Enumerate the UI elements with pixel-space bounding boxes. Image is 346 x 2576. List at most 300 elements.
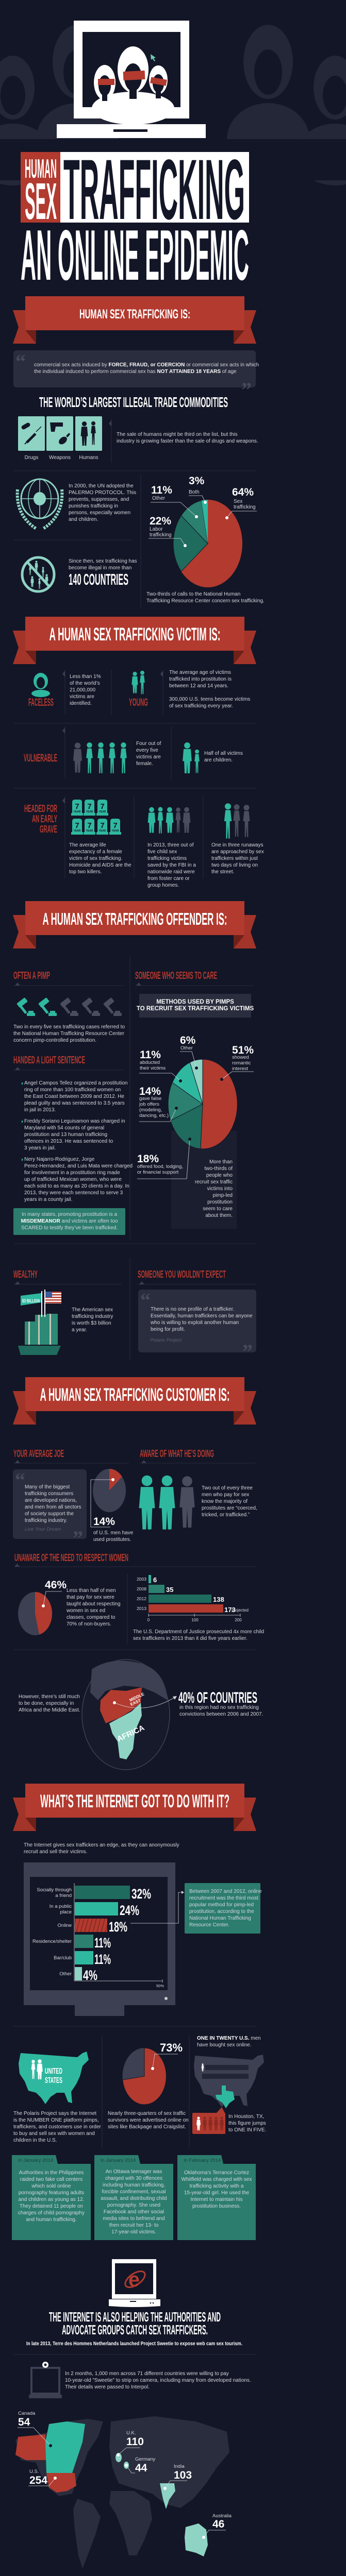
text: card ottawa: 17-year-old victims.: [111, 2229, 156, 2235]
text: two thirds of calls: Two-thirds of calls to the National Human: [146, 591, 240, 597]
text: YOUR AVERAGE JOE: [13, 1448, 64, 1460]
icon: laptop with browser: [109, 2259, 160, 2307]
text: card oklahoma: trafficking activity with a: [190, 2183, 243, 2189]
bar chart: prosecutions: 200: [235, 1618, 242, 1622]
bar chart: prosecutions: 2013: [137, 1606, 146, 1611]
icon: tombstones 7 years: 7: [87, 802, 92, 811]
text: sex ed: 70% of non-buyers.: [67, 1621, 111, 1627]
text: faceless: identified.: [70, 701, 92, 706]
40% of countries: 40% OF COUNTRIES: [178, 1689, 257, 1706]
icon: laptop with browser: e: [128, 2268, 140, 2291]
icon: young children: [131, 671, 145, 694]
header box: methods used by pimps: METHODS USED BY PIMPS: [156, 999, 234, 1005]
pie chart: recruitment methods: 18%: [137, 1153, 159, 1165]
pie chart: 73% advertised online: 73%: [160, 2041, 183, 2054]
bar chart: prosecutions: 173: [224, 1606, 236, 1614]
text: seem to care: pimp-led: [213, 1193, 233, 1198]
text: houston: to ONE IN FIVE.: [228, 2127, 266, 2133]
text: biggest consumers: and men from all sectors: [25, 1504, 81, 1510]
globe: africa and middle east: EAST: [129, 1698, 142, 1707]
world map: sweetie offenders by country: 44: [135, 2462, 147, 2474]
text: foster care: from foster care or: [147, 876, 190, 882]
text: internet edge: recruit and sell their victims.: [24, 1849, 87, 1855]
text: sweetie: In 2 months, 1,000 men across 71 different countries were willing to pay: [65, 2371, 229, 2377]
quote box: live your dream: Live Your Dream: [25, 1527, 61, 1532]
text: half children: Half of all victims: [204, 751, 243, 756]
world map: sweetie offenders by country: Australia: [212, 2513, 232, 2519]
icon: tombstones 7 years: 7: [87, 821, 92, 830]
text: sex ed: women in sex ed: [67, 1608, 105, 1614]
bar chart in monitor: recruitment locations: Online: [58, 1923, 72, 1928]
text: number one platform: to buy and sell sex with women and: [13, 2131, 95, 2137]
pie chart: hotline calls: 11%: [151, 484, 172, 496]
icon: map one in twenty and houston: [192, 2055, 264, 2134]
icon: tombstones 7 years: 7: [113, 821, 118, 830]
quote text: definition: commercial sex acts induced by FORCE, FRAUD, or COERCION or commercial sex acts in which: [34, 362, 259, 368]
text: card oklahoma: [182, 2170, 252, 2209]
icon: money stacks with flags: [18, 1290, 61, 1355]
text: life expectancy: expectancy of a female: [69, 849, 122, 855]
text: sweetie: [65, 2371, 251, 2390]
text: biggest consumers: Many of the biggest: [25, 1484, 70, 1490]
icon: runaways: [224, 803, 250, 839]
ribbon: customer: [13, 1377, 256, 1425]
text: pimp-controlled: [13, 1024, 125, 1043]
bar chart in monitor: recruitment locations: place: [60, 1909, 72, 1915]
world map: sweetie offenders by country: [15, 2411, 232, 2568]
text: department of justice: The U.S. Department of Justice prosecuted 4x more child: [133, 1629, 264, 1635]
pie chart: hotline calls: 22%: [150, 515, 171, 527]
icon: tombstones 7 years: [71, 800, 121, 835]
ribbon: internet: [13, 1784, 256, 1831]
text: palermo protocol: [69, 483, 136, 522]
pie chart: recruitment methods: interest: [232, 1066, 249, 1072]
text: department of justice: sex traffickers in 2013 than it did five years earlier.: [133, 1636, 248, 1641]
text: seem to care: about them.: [205, 1213, 233, 1218]
icon labels: Humans: [79, 455, 98, 461]
text: foster care: [147, 842, 196, 888]
text: sex ed: [67, 1588, 121, 1627]
text: AWARE OF WHAT HE’S DOING: [140, 1448, 214, 1460]
news cards: In February 2014: [184, 2158, 221, 2163]
text: female victims: Four out of: [136, 741, 161, 747]
text: american industry: trafficking industry: [72, 1314, 113, 1319]
text: sex ed: Less than half of men: [67, 1588, 116, 1594]
quote box: live your dream: “: [15, 1468, 25, 1492]
bar chart: prosecutions: 0: [147, 1618, 150, 1622]
text: no one profile: who is willing to exploit another human: [151, 1320, 239, 1326]
text: houston: [228, 2114, 266, 2133]
text: card ottawa: pornography. She used: [107, 2202, 160, 2208]
news cards: In January 2014: [18, 2158, 53, 2163]
text: sweetie: Their details were passed to Interpol.: [65, 2384, 150, 2390]
title: human sex trafficking: SEX: [25, 173, 57, 230]
text: card oklahoma: Internet to maintain his: [190, 2197, 243, 2202]
text: card philippines: Authorities in the Philippines: [19, 2170, 84, 2176]
bar chart in monitor: recruitment locations: 18%: [109, 1919, 127, 1935]
text: card oklahoma: Whitfield was charged with sex: [182, 2177, 252, 2182]
text: SOMEONE YOU WOULDN’T EXPECT: [138, 1269, 226, 1280]
bar chart: prosecutions: 100: [191, 1618, 199, 1622]
text: since then: become illegal in more than: [69, 565, 131, 571]
bar chart in monitor: recruitment locations: a friend: [55, 1893, 72, 1899]
bar chart in monitor: recruitment locations: 50%: [156, 1984, 164, 1988]
text: callout online recruitment: prostitution, according to the: [189, 1909, 254, 1914]
text: foster care: In 2013, three out of: [147, 842, 194, 848]
pie chart: 73% advertised online: [123, 2041, 183, 2105]
text: one in twenty: [197, 2036, 261, 2048]
text: case 3: each sold to as many as 20 clients in a day. In: [24, 1183, 129, 1189]
text: faceless: [70, 674, 101, 706]
quote box: definition: ”: [241, 378, 252, 401]
text: runaways: the street.: [211, 869, 234, 875]
pie chart: hotline calls: Labor: [150, 527, 163, 532]
text: life expectancy: Homicide and AIDS are the: [69, 862, 131, 868]
text: seem to care: victims into: [207, 1186, 233, 1192]
text: card ottawa: An Ottawa teenager was: [106, 2169, 162, 2175]
pie chart: recruitment methods: 14%: [139, 1086, 161, 1097]
pie chart: hotline calls: Sex: [234, 499, 242, 504]
text: callout online recruitment: Between 2007 and 2012, online: [189, 1889, 262, 1894]
text: palermo protocol: prevents, suppresses, and: [69, 497, 129, 502]
text: foster care: nationwide raid were: [147, 869, 195, 875]
text: callout online recruitment: [189, 1889, 262, 1928]
text: young: 300,000 U.S. teens become victims: [169, 697, 250, 702]
text: houston: In Houston, TX,: [228, 2114, 264, 2120]
text: foster care: trafficking victims: [147, 856, 187, 861]
text: runaways: two days of living on: [211, 862, 258, 868]
icon: money stacks with flags: $3 BILLION: [22, 1298, 40, 1303]
text: FACELESS: [28, 697, 54, 708]
text: life expectancy: The average life: [69, 842, 106, 848]
text: used prostitutes: [93, 1530, 133, 1543]
icon: tombstones 7 years: YEAR: [99, 810, 106, 814]
text: case 1: in jail in 2013.: [24, 1107, 56, 1113]
text: card philippines: raided two fake call centers: [20, 2177, 83, 2182]
world map: sweetie offenders by country: 110: [126, 2436, 144, 2448]
bar chart: prosecutions: 2008: [137, 1586, 146, 1591]
text: case 1: ring of more than 100 trafficked women on: [24, 1087, 121, 1093]
text: misdemeanor: SCARED to testify they’ve been trafficked.: [21, 1225, 118, 1231]
text: two out of three men: men who pay for sex: [202, 1492, 249, 1498]
quote box: definition: “: [15, 350, 26, 373]
text: card oklahoma: Oklahoma’s Terrance Cortez: [184, 2170, 249, 2176]
quote box: definition: [13, 350, 256, 401]
pie chart: recruitment methods: 51%: [232, 1044, 254, 1056]
text: faceless: victims are: [70, 694, 94, 700]
pie chart: recruitment methods: 6%: [180, 1035, 196, 1046]
text: palermo protocol: punishes trafficking in: [69, 503, 118, 509]
text: no one profile: [151, 1307, 253, 1332]
text: sale of humans: industry is growing faster than the sale of drugs and weapons.: [117, 438, 258, 444]
icon labels: Weapons: [49, 455, 71, 461]
quote box: polaris project: [138, 1289, 256, 1363]
text: no convictions: convictions between 2006 and 2007.: [179, 1711, 263, 1717]
text: AN EARLY: [32, 814, 57, 825]
text: HANDED A LIGHT SENTENCE: [13, 1055, 85, 1066]
bar chart in monitor: recruitment locations: In a public: [50, 1904, 72, 1909]
text: young: between 12 and 14 years.: [169, 683, 228, 689]
header background faces: [0, 25, 346, 185]
icon: tombstones 7 years: YEAR: [99, 829, 106, 833]
text: case 1: [24, 1080, 128, 1113]
quote box: live your dream: [13, 1468, 87, 1550]
bar chart in monitor: recruitment locations: 11%: [94, 1935, 111, 1951]
text: biggest consumers: trafficking consumers: [25, 1491, 73, 1497]
text: no one profile: There is no one profile of a trafficker.: [151, 1307, 234, 1312]
text: american industry: [72, 1307, 113, 1333]
icon: united states map: [19, 2052, 89, 2104]
heading: often a pimp: OFTEN A PIMP: [13, 970, 50, 981]
text: biggest consumers: of society support the: [25, 1511, 74, 1517]
text: two out of three men: [202, 1485, 257, 1518]
text: card philippines: [18, 2170, 85, 2223]
text: YOUNG: [129, 697, 148, 708]
text: card philippines: and human trafficking.: [26, 2217, 77, 2223]
text: two out of three men: know the majority of: [202, 1499, 248, 1504]
text: backpage craigslist: sites like Backpage and Craigslist.: [108, 2124, 186, 2130]
icon labels: [25, 455, 98, 461]
text: half children: are children.: [204, 757, 233, 763]
bar chart: prosecutions: 2012: [137, 1596, 146, 1601]
ribbon: human sex trafficking is: HUMAN SEX TRAFFICKING IS:: [79, 307, 190, 321]
bar chart in monitor: recruitment locations: [24, 1862, 175, 2016]
text: half children: [204, 751, 243, 763]
text: palermo protocol: persons, especially women: [69, 510, 130, 516]
text: callout online recruitment: recruitment was the third most: [189, 1895, 258, 1901]
callout: misdemeanor: [13, 1208, 125, 1235]
pie chart: recruitment methods: gave false: [139, 1096, 161, 1101]
text: female victims: every five: [136, 748, 158, 753]
text: biggest consumers: trafficking industry.: [25, 1518, 67, 1523]
bar chart: prosecutions: 6: [153, 1576, 157, 1584]
text: runaways: traffickers within just: [211, 856, 258, 861]
pie chart: hotline calls: 3%: [189, 475, 205, 487]
text: life expectancy: [69, 842, 131, 875]
text: two out of three men: tricked, or trafficked.”: [202, 1512, 250, 1518]
pie chart: recruitment methods: showed: [232, 1055, 249, 1060]
text: runaways: are approached by sex: [211, 849, 264, 855]
heading: internet helping authorities: [49, 2309, 221, 2337]
text: foster care: saved by the FBI in a: [147, 862, 196, 868]
bar chart: prosecutions: 2003: [137, 1577, 146, 1582]
globe: africa and middle east: MIDDLE: [128, 1691, 145, 1703]
text: case 2: prostitution and 13 human trafficking: [24, 1132, 107, 1138]
pie chart: 14% of men: [91, 1469, 126, 1528]
quote box: polaris project: “: [140, 1289, 151, 1312]
text: palermo protocol: and children.: [69, 517, 98, 522]
text: life expectancy: victim of sex trafficking.: [69, 856, 122, 861]
text: VULNERABLE: [24, 752, 57, 764]
text: seem to care: recruit sex traffic: [195, 1179, 233, 1185]
icon: tombstones 7 years: YEAR: [86, 829, 93, 833]
text: used prostitutes: used prostitutes.: [93, 1537, 131, 1543]
text: card ottawa: media sites to befriend and: [103, 2216, 165, 2222]
text: UNAWARE OF THE NEED TO RESPECT WOMEN: [14, 1552, 128, 1564]
pie chart: recruitment methods: dancing, etc.): [139, 1113, 169, 1118]
text: runaways: [211, 842, 264, 875]
news cards: In January 2014: [101, 2158, 136, 2163]
world map: sweetie offenders by country: Canada: [18, 2411, 36, 2416]
text: callout online recruitment: Resource Center.: [189, 1922, 229, 1928]
pie chart: hotline calls: 64%: [232, 486, 254, 498]
pie chart: 46%: [18, 1579, 67, 1635]
text: case 2: Maryland with 54 counts of general: [24, 1125, 104, 1131]
bar chart in monitor: recruitment locations: Residence/shelter: [32, 1939, 72, 1944]
text: young: [169, 670, 250, 709]
text: case 3: for involvement in a prostitution ring made: [24, 1170, 120, 1176]
pie chart: recruitment methods: or financial support: [137, 1170, 179, 1175]
text: palermo protocol: PALERMO PROTOCOL. This: [69, 490, 136, 496]
text: case 3: Perez-Hernandez, and Luis Mata were charged: [24, 1163, 133, 1169]
text: card oklahoma: prostitution business.: [192, 2204, 241, 2209]
text: seem to care: [195, 1159, 233, 1218]
text: runaways: One in three runaways: [211, 842, 263, 848]
pie chart: hotline calls: trafficking: [234, 504, 256, 510]
icons: drugs weapons humans: [18, 416, 102, 451]
text: number one platform: traffickers, and customers use in order: [13, 2124, 101, 2130]
text: callout online recruitment: popular method for pimp-led: [189, 1902, 254, 1908]
text: africa middle east: Africa and the Middle East.: [19, 1707, 80, 1713]
bar chart in monitor: recruitment locations: 11%: [94, 1952, 111, 1967]
text: american industry: is worth $3 billion: [72, 1320, 111, 1326]
text: two out of three men: Two out of every three: [202, 1485, 253, 1491]
text: sweetie: 10-year-old "Sweetie" to strip on camera, including many from developed nations.: [65, 2378, 251, 2383]
bar chart in monitor: recruitment locations: 24%: [120, 1903, 139, 1918]
text: sale of humans: The sale of humans might be third on the list, but this: [117, 432, 238, 437]
text: card ottawa: including human trafficking,: [103, 2182, 165, 2188]
title: human sex trafficking: [21, 142, 249, 238]
icon: tombstones 7 years: 7: [100, 802, 105, 811]
text: no convictions: [179, 1705, 263, 1717]
text: used prostitutes: of U.S. men have: [93, 1530, 133, 1536]
quote text: definition: the individual induced to perform commercial sex has NOT ATTAINED 18 YEARS of age: [34, 369, 237, 375]
text: since then: [69, 558, 137, 571]
text: two thirds of calls: [146, 591, 265, 604]
text: seem to care: two-thirds of: [205, 1166, 233, 1172]
icon: UN emblem: [18, 479, 62, 529]
icon: half children: [183, 742, 200, 773]
icon: foster children: [148, 807, 190, 834]
bar chart in monitor: recruitment locations: 32%: [131, 1886, 151, 1902]
text: GRAVE: [40, 824, 57, 835]
early grave label: [24, 803, 57, 835]
icon: tombstones 7 years: 7: [100, 821, 105, 830]
text: case 2: offences in 2013. He was sentenced to: [24, 1139, 113, 1144]
world map: sweetie offenders by country: 54: [18, 2416, 30, 2428]
bar chart: prosecutions: [137, 1575, 249, 1622]
text: misdemeanor: In many states, promoting prostitution is a: [22, 1212, 117, 1217]
bar chart in monitor: recruitment locations: Other: [59, 1971, 72, 1977]
text: no convictions: in this region had no sex trafficking: [179, 1705, 259, 1710]
icon labels: Drugs: [25, 455, 38, 461]
text: houston: this figure jumps: [228, 2121, 266, 2126]
bar chart in monitor: recruitment locations: Socially through: [37, 1887, 72, 1893]
pie chart: 14% of men: 14%: [93, 1516, 115, 1528]
header box: methods used by pimps: TO RECRUIT SEX TRAFFICKING VICTIMS: [137, 1006, 254, 1012]
text: young: The average age of victims: [169, 670, 231, 675]
bar chart in monitor: recruitment locations: 4%: [83, 1968, 97, 1983]
icon: four of five female: [73, 742, 127, 773]
icon: united states map: STATES: [45, 2076, 62, 2085]
text: female victims: female.: [136, 761, 153, 767]
icon: united states map: UNITED: [45, 2067, 62, 2076]
pie chart: hotline calls: Other: [152, 496, 166, 501]
text: backpage craigslist: survivors were advertised online on: [108, 2117, 189, 2123]
text: foster care: five child sex: [147, 849, 177, 855]
text: case 3: 2013, they were each sentenced to serve 3: [24, 1190, 123, 1196]
pie chart: recruitment methods: romantic: [232, 1060, 251, 1066]
world map: sweetie offenders by country: 103: [174, 2469, 192, 2481]
icon: laptop with webcam: [29, 2362, 62, 2398]
quote box: live your dream: ”: [73, 1527, 83, 1550]
text: card oklahoma: 15-year-old girl. He used the: [184, 2190, 249, 2196]
text: seem to care: seem to care: [203, 1206, 233, 1212]
title: human sex trafficking: HUMAN: [25, 154, 57, 184]
globe: africa and middle east: AFRICA: [116, 1723, 146, 1743]
icon: tombstones 7 years: YEAR: [74, 810, 81, 814]
text: palermo protocol: In 2000, the UN adopted the: [69, 483, 134, 489]
icon: men who pay: [139, 1476, 195, 1530]
text: card philippines: which sold online: [31, 2183, 71, 2189]
text: one in twenty: ONE IN TWENTY U.S. men: [197, 2036, 261, 2041]
text: card ottawa: [101, 2169, 167, 2235]
icon: tombstones 7 years: YEAR: [112, 829, 119, 833]
text: pimp-controlled: Two in every five sex trafficking cases referred to: [13, 1024, 125, 1030]
text: card ottawa: forcible confinement, sexual: [102, 2189, 166, 2195]
quote text: definition: [34, 362, 259, 375]
text: case 2: Freddy Soriano Leguisamon was charged in: [24, 1118, 125, 1124]
pie chart: recruitment methods: Other: [180, 1045, 193, 1051]
text: two thirds of calls: Trafficking Resource Center concern sex trafficking.: [146, 598, 265, 604]
pie chart: 46%: 46%: [45, 1579, 67, 1591]
icon: laptop with three faces: [57, 21, 206, 138]
text: no one profile: being for profit.: [151, 1327, 185, 1332]
text: africa middle east: to be done, especially in: [19, 1701, 74, 1706]
subheading: project sweetie: In late 2013, Terre des Hommes Netherlands launched Project Sweetie to expose web cam sex tourism.: [26, 2341, 242, 2347]
text: card ottawa: Facebook and other social: [104, 2209, 164, 2215]
ribbon: human sex trafficking is: [13, 296, 256, 344]
text: card philippines: and children as young as 12.: [19, 2197, 84, 2202]
text: card ottawa: assault, and distributing child: [101, 2196, 167, 2201]
text: american industry: The American sex: [72, 1307, 113, 1313]
world map: sweetie offenders by country: Germany: [135, 2456, 155, 2462]
pie chart: recruitment methods: 11%: [140, 1049, 161, 1061]
quote box: polaris project: Polaris Project: [150, 1337, 182, 1343]
pie chart: hotline calls: Both: [189, 489, 200, 495]
text: young: of sex trafficking every year.: [169, 703, 233, 709]
text: biggest consumers: [25, 1484, 81, 1523]
bar chart in monitor: recruitment locations: Bar/club: [54, 1955, 72, 1961]
text: internet edge: The Internet gives sex traffickers an edge, as they can anonymously: [24, 1842, 179, 1848]
text: callout online recruitment: National Human Trafficking: [189, 1916, 251, 1921]
world map: sweetie offenders by country: India: [174, 2464, 185, 2469]
text: africa middle east: However, there’s still much: [19, 1694, 80, 1700]
quote box: polaris project: ”: [242, 1340, 253, 1363]
text: WEALTHY: [13, 1269, 38, 1280]
text: pimp-controlled: the National Human Trafficking Resource Center: [13, 1031, 124, 1037]
text: HEADED FOR: [24, 803, 57, 815]
text: card ottawa: then recruit her 13- to: [109, 2223, 158, 2228]
pie chart: recruitment methods: offered food, lodging,: [137, 1164, 183, 1170]
text: seem to care: people who: [206, 1173, 233, 1178]
text: 140 COUNTRIES: [69, 570, 128, 588]
world map: sweetie offenders by country: 46: [212, 2518, 224, 2530]
text: biggest consumers: are developed nations,: [25, 1498, 77, 1503]
text: card philippines: pornography featuring adults: [19, 2190, 84, 2196]
text: number one platform: children in the U.S.: [13, 2138, 57, 2143]
ribbon: victim: [13, 617, 256, 664]
